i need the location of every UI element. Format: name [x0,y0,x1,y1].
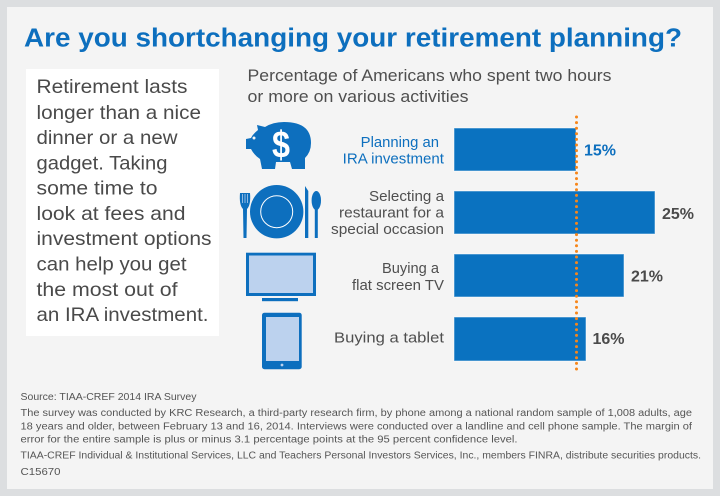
value labels: 21% [631,269,663,286]
category labels: Buying a tablet [334,331,444,347]
icon: tablet [262,313,302,369]
category labels: Planning an [361,135,439,151]
icon: flat screen TV [246,253,316,301]
value labels [584,143,694,348]
footnotes: The survey was conducted by KRC Research, a third-party research firm, by phone among a national random sample of 1,008 adults, age [20,408,692,419]
category labels [331,135,445,347]
category labels: special occasion [331,222,444,238]
footnotes [20,392,701,478]
chart heading [248,66,612,106]
title: Are you shortchanging your retirement planning? [24,24,682,52]
panel: intro text: look at fees and [36,203,186,225]
panel: intro text: investment options [36,228,212,250]
panel: intro text: an IRA investment. [36,304,208,326]
panel: intro text: Retirement lasts [36,76,188,98]
bar chart [454,128,655,361]
panel: intro text [26,69,219,336]
footnotes: 18 years and older, between February 13 and 16, 2014. Interviews were conducted over a landline and cell phone sample. The margin of [20,421,692,432]
icon: piggy bank: $ [272,124,290,166]
chart heading: Percentage of Americans who spent two hours [248,66,612,85]
footnotes: TIAA-CREF Individual & Institutional Services, LLC and Teachers Personal Investors Services, Inc., members FINRA, distribute securities products. [20,451,701,462]
panel: intro text: longer than a nice [36,102,201,124]
panel: intro text: can help you get [36,254,187,276]
footnotes: C15670 [20,467,61,478]
reference line [575,117,578,373]
category labels: Buying a [382,261,440,277]
panel: intro text: some time to [36,178,158,200]
icon: plate and cutlery [240,185,321,238]
category labels: IRA investment [343,152,444,168]
category labels: Selecting a [369,189,445,205]
category labels: flat screen TV [352,278,444,294]
footnotes: Source: TIAA-CREF 2014 IRA Survey [20,392,196,403]
category labels: restaurant for a [339,206,445,222]
value labels: 15% [584,143,616,160]
value labels: 16% [592,331,625,348]
icon: piggy bank [246,122,311,169]
panel: intro text: gadget. Taking [36,152,168,174]
chart heading: or more on various activities [248,87,468,106]
panel: intro text: dinner or a new [36,127,178,149]
panel: intro text: the most out of [36,279,178,301]
value labels: 25% [662,206,694,223]
footnotes: error for the entire sample is plus or minus 3.1 percentage points at the 95 percent confidence level. [20,435,518,446]
